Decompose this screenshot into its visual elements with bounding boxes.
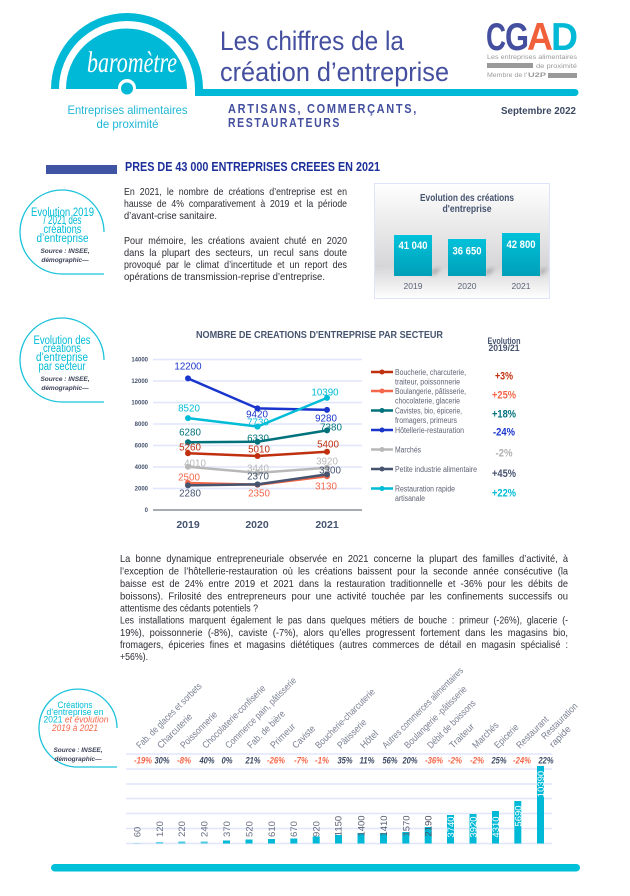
panel: evolution des créations bar chart: 2021 [512,281,531,291]
line chart: créations par secteur: 0 [145,508,149,514]
header logo: baromètre [51,13,203,97]
CGAD logo: U2P [528,72,547,79]
line chart: créations par secteur [131,358,362,531]
bar values [132,771,547,838]
rotated category labels: Autres commerces alimentaires [380,665,466,751]
callout: evolution 2019/2021: démographic— [41,257,89,264]
evolution column: +3% [495,370,513,382]
data labels: 6330 [247,434,269,444]
evolution column: Evolution [488,336,520,346]
callout: evolution par secteur [20,318,104,402]
legend: fromagers, primeurs [395,416,457,425]
series: petite industrie [185,471,330,488]
percent row: 56% [382,756,398,766]
date: Septembre 2022 [501,105,576,117]
percent row: -2% [470,756,484,766]
bar values: 1570 [402,815,412,837]
CGAD logo [486,16,578,79]
data labels: 10390 [311,388,339,398]
bar chart: créations 2021 par métier [126,754,554,844]
percent row: -19% [134,756,152,766]
panel: evolution des créations bar chart: 41 040 [398,240,428,252]
callout: evolution 2019/2021 [20,190,104,274]
logo tagline: de proximité [96,117,159,131]
callout: evolution 2019/2021: Evolution 2019 [31,207,94,219]
title: Les chiffres de la [220,26,405,56]
panel: evolution des créations bar chart: 2020 [458,281,477,291]
logo tagline: Entreprises alimentaires [68,103,188,117]
data labels: 2350 [248,488,270,500]
logo tagline [68,103,188,131]
CGAD logo: G [505,16,529,59]
text block: analysis: 19%), poissonnerie (-8%), caviste (-7%), alors qu’elles progressent fortement dans les magasins bio, [120,627,568,639]
data labels: 3920 [316,456,338,468]
data labels: 7730 [247,418,269,428]
callout: evolution 2019/2021: créations [44,224,82,236]
text block: analysis: boissons). Frilosité des entrepreneurs pour une activité touchée par les confinements successifs ou [120,590,568,602]
text block: analysis: attentisme des cédants potentiels ? [120,602,258,614]
section marker [46,165,117,174]
legend: Hôtellerie-restauration [395,426,464,435]
line chart: créations par secteur: 2019 [176,519,200,531]
percent row: -1% [315,756,329,766]
panel: evolution des créations bar chart [374,184,550,298]
rotated category labels: Charcuterie [155,712,195,751]
text block: analysis: La bonne dynamique entrepreneuriale observée en 2021 concerne la plupart des familles d’activité, à [120,553,568,565]
series: restauration rapide [185,395,330,430]
bar values: 240 [200,821,210,837]
series: cavistes [185,427,330,445]
line chart: créations par secteur: 6000 [135,444,149,450]
data labels: 3300 [319,466,341,476]
callout: créations 2021 et évolution: Source : INSEE, [53,747,103,754]
rotated category labels: Pâtisserie [335,717,369,751]
line chart: créations par secteur: 4000 [135,465,149,471]
section heading: PRES DE 43 000 ENTREPRISES CREEES EN 2021 [125,160,380,174]
subtitle: ARTISANS, COMMERÇANTS, [228,101,418,116]
percent row: -7% [294,756,308,766]
text block: analysis: fromagers, épiceries fines et magasins diététiques (autres commerces de détail en magasin spécialisé : [120,639,568,651]
evolution column: +22% [492,488,516,500]
evolution column: 2019/21 [488,343,520,353]
bar values: 1410 [379,815,390,837]
data labels: 3130 [315,482,337,492]
data labels: 9420 [246,410,268,420]
callout: evolution par secteur: Source : INSEE, [40,376,90,383]
line chart: créations par secteur: 10000 [131,400,149,406]
callout: evolution par secteur: créations [43,343,81,355]
text block: intro: d’avant-crise sanitaire. [124,210,217,222]
rotated category labels: Marchés [470,720,502,751]
percent row: -36% [425,756,443,766]
legend: artisanale [395,494,425,503]
data labels: 2370 [247,472,269,482]
rotated category labels: Fab. de glaces et sorbets [134,681,204,751]
data labels: 5400 [317,440,339,450]
callout: créations 2021 et évolution: Créations [58,700,93,711]
text block: intro: hausse de 4% comparativement à 2019 et la période [124,198,347,210]
header logo: baromètre: baromètre [87,46,177,79]
data labels: 5010 [248,444,270,456]
title: création d’entreprise [220,57,449,87]
data labels: 5260 [179,442,201,454]
callout: evolution par secteur: Evolution des [34,335,91,347]
line chart: créations par secteur: 2021 [315,519,339,531]
percent row: 22% [538,756,554,766]
title [220,26,449,87]
series: marchés [185,464,330,476]
callout: créations 2021 et évolution: d’entreprise en [46,707,104,718]
data labels: 12200 [174,362,202,372]
series: boulangerie [185,473,330,488]
bar values: 4310 [491,816,502,838]
evolution column: -2% [496,448,513,460]
panel: evolution des créations bar chart: 2019 [404,281,423,291]
percent row: 30% [154,756,170,766]
callout: evolution 2019/2021: d’entreprise [36,233,88,245]
CGAD logo: Membre de l' [487,72,527,79]
bar values: 670 [289,821,300,837]
percent row: 40% [199,756,215,766]
rotated category labels: Restauration [539,701,580,742]
percent row: -8% [177,756,191,766]
data labels: 4010 [184,458,206,470]
legend: chocolaterie, glacerie [395,396,460,406]
rotated category labels: Débit de boissons [425,698,479,751]
callout: evolution 2019/2021: Source : INSEE, [40,248,90,255]
callout: evolution par secteur: démographic— [41,385,89,392]
percent row: -26% [267,756,285,766]
bar values: 920 [312,821,322,837]
line chart: créations par secteur: 2020 [245,519,269,531]
callout: créations 2021 et évolution: 2021 et évolution [44,714,108,726]
rotated category labels: Caviste [290,724,318,751]
bar values: 220 [177,821,188,837]
subtitle: RESTAURATEURS [228,115,341,130]
rotated category labels: rapide [547,724,574,750]
panel: evolution des créations bar chart: d'entreprise [442,204,492,215]
rotated category labels: Boucherie-charcuterie [313,687,378,751]
rotated category labels: Primeur [268,721,298,751]
text block: intro: Pour mémoire, les créations avaient chuté en 2020 [124,235,347,247]
legend: Boulangerie, pâtisserie, [395,387,466,396]
percent row: 25% [491,756,507,766]
series: hôtellerie-restauration [185,375,330,413]
data labels: 2280 [179,488,201,500]
subtitle [228,101,418,130]
percent row: 0% [222,756,233,766]
line chart: créations par secteur: 12000 [131,379,149,385]
data labels: 9280 [315,414,337,424]
line chart: créations par secteur: 2000 [135,486,149,492]
callout: evolution par secteur: par secteur [38,361,86,373]
percent row [134,756,554,766]
callout: créations 2021 et évolution: démographic— [54,756,102,763]
rotated category labels: Boulangerie -pâtisserie [402,684,470,751]
CGAD logo: de proximité [536,63,577,70]
rotated category labels: Fab. de bière [245,709,288,751]
evolution column: -24% [493,426,515,438]
data labels [174,362,342,500]
bar values: 520 [244,821,256,837]
legend: Boucherie, charcuterie, [395,368,466,377]
callout: evolution par secteur: d’entreprise [36,352,88,364]
rotated category labels: Hôtel [358,728,381,751]
CGAD logo: D [551,16,578,59]
text block: analysis: l’exception de l’hôtellerie-restauration où les créations baissent pour la seconde année consécutive (la [120,566,568,578]
rotated category labels: Commerce pain, pâtisserie [223,675,299,751]
rotated category labels: Chocolaterie-confiserie [200,683,268,751]
CGAD logo: Les entreprises alimentaires [487,54,578,61]
percent row: -2% [448,756,462,766]
legend: Marchés [395,446,421,454]
bar values: 3740 [446,816,457,838]
rotated category labels: Epicerie [492,722,521,751]
callout: evolution 2019/2021: / 2021 des [44,215,82,227]
text block: intro: En 2021, le nombre de créations d’entreprise est en [124,186,347,198]
percent row: 35% [338,756,353,766]
line chart: créations par secteur: 8000 [135,422,149,428]
legend: Restauration rapide [395,484,455,494]
rotated category labels: Restaurant [514,714,551,751]
panel: evolution des créations bar chart: 36 650 [452,246,482,258]
panel: evolution des créations bar chart: Evolution des créations [420,193,514,204]
rotated category labels: Traiteur [447,721,477,751]
data labels: 2500 [178,472,200,484]
callout: créations 2021 et évolution: 2019 à 2021 [51,723,98,734]
callout: créations 2021 et évolution [39,689,117,767]
legend: traiteur, poissonnerie [395,378,460,386]
legend: Petite industrie alimentaire [395,465,477,474]
bar values: 1150 [334,816,344,836]
text block: intro [124,186,347,283]
legend: Cavistes, bio, épicerie, [395,406,462,416]
bar values: 5690 [514,805,524,827]
bar values: 2190 [424,815,434,837]
line chart title: NOMBRE DE CREATIONS D'ENTREPRISE PAR SECTEUR [196,329,443,341]
line chart: créations par secteur: 14000 [131,358,149,364]
bar values: 60 [132,827,144,837]
evolution column: +18% [492,408,516,420]
legend [371,368,477,503]
bars [134,766,544,844]
bar values: 1400 [356,815,368,837]
text block: analysis: +56%). [120,651,148,663]
percent row: 20% [402,756,418,766]
data labels: 6280 [179,428,201,438]
data labels: 8520 [178,404,200,414]
bar values: 610 [267,821,278,837]
footer bar [51,864,580,872]
text block: analysis: baisse est de 24% entre 2019 et 2021 dans la restauration traditionnelle et -36% pour les débits de [120,578,568,590]
data labels: 7380 [320,422,342,434]
percent row: 11% [360,756,375,766]
data labels: 3440 [247,464,269,474]
bar values: 370 [222,821,233,837]
CGAD logo: C [486,16,506,59]
evolution column: +25% [492,390,516,402]
bar values: 120 [155,821,166,837]
rotated category labels [134,665,580,751]
panel: evolution des créations bar chart: 42 800 [506,239,536,251]
CGAD logo: A [527,16,553,59]
bar values: 10390 [536,771,547,797]
evolution column: +45% [492,468,516,480]
text block: intro: provoqué par le climat d’incertitude et un report des [124,259,347,271]
percent row: 21% [245,756,261,766]
series: boucherie [185,449,330,459]
text block: intro: opérations de transmission-reprise d’entreprise. [124,271,325,283]
text block: intro: dans la plupart des secteurs, un recul sans doute [124,247,347,259]
header rule [195,89,578,96]
text block: analysis [120,553,568,663]
evolution column [488,336,520,500]
rotated category labels: Poissonnerie [178,709,220,751]
percent row: -24% [513,756,531,766]
bar values: 3920 [468,816,480,838]
